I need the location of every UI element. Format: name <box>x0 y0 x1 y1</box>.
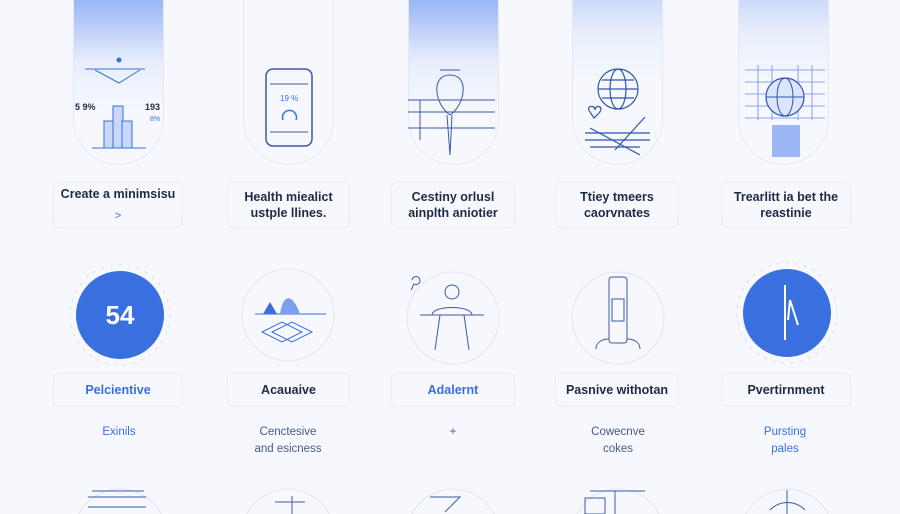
label 3 <box>391 373 515 407</box>
subtitle 5: Pursting <box>764 426 806 438</box>
caption 4 <box>555 182 679 228</box>
subtitle 2: Cenctesive <box>260 426 316 438</box>
subtitle 4: Cowecnve <box>591 426 645 438</box>
label 2: Acauaive <box>261 383 316 397</box>
subtitle 4: cokes <box>603 443 633 455</box>
icon: bar chart: 8% <box>150 116 160 123</box>
subtitle 2: and esicness <box>254 443 322 455</box>
caption 1: > <box>115 210 121 222</box>
caption 5: reastinie <box>760 206 812 220</box>
capsule 3 <box>408 0 499 165</box>
label 5: Pvertirnment <box>747 383 825 397</box>
caption 2 <box>227 182 350 228</box>
label 1: Pelcientive <box>85 383 151 397</box>
capsule 5 <box>738 0 829 165</box>
label 5 <box>721 373 851 407</box>
caption 3: ainplth aniotier <box>408 206 498 220</box>
icon: bar chart: 193 <box>145 102 160 112</box>
subtitle 4 <box>591 426 645 455</box>
subtitle 3: + <box>450 426 456 438</box>
subtitle 2 <box>254 426 322 455</box>
caption 1: Create a minimsisu <box>61 187 175 201</box>
label 4 <box>555 373 679 407</box>
icon circle 1: 54: 54 <box>106 300 135 330</box>
subtitle 5 <box>764 426 806 455</box>
caption 4: Ttiey tmeers <box>580 190 654 204</box>
caption 1 <box>53 182 183 228</box>
icon: phone: 19 % <box>280 94 298 103</box>
label 3: Adalernt <box>428 383 478 397</box>
caption 3 <box>391 182 515 228</box>
label 1 <box>53 373 183 407</box>
capsule 4 <box>572 0 663 165</box>
caption 5 <box>721 182 851 228</box>
label 2 <box>227 373 350 407</box>
subtitle 1: Exinils <box>102 426 136 438</box>
caption 4: caorvnates <box>584 206 650 220</box>
caption 2: ustple llines. <box>251 206 326 220</box>
caption 5: Trearlitt ia bet the <box>734 190 838 204</box>
icon: bar chart: 5 9% <box>75 102 96 112</box>
subtitle 5: pales <box>771 443 799 455</box>
label 4: Pasnive withotan <box>566 383 668 397</box>
capsule 2 <box>243 0 334 165</box>
caption 2: Health miealict <box>244 190 333 204</box>
capsule 1 <box>73 0 164 165</box>
caption 3: Cestiny orlusl <box>412 190 494 204</box>
